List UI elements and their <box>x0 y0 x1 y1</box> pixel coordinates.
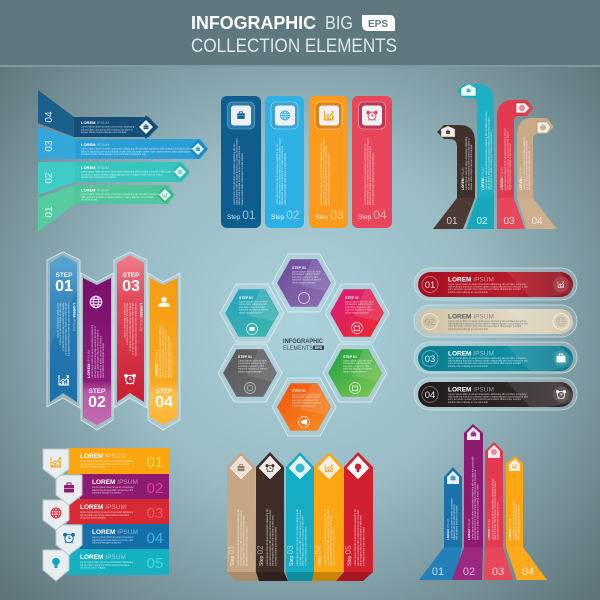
badge: EPS <box>362 15 395 31</box>
ribbon step 04: 04 <box>155 394 173 411</box>
hexagon grey: consectetur adipiscing elit <box>238 362 266 365</box>
hexagon grey: STEP 01 <box>238 355 252 359</box>
pill 03: LOREM IPSUM <box>448 350 494 358</box>
bar 03: elit sed diam nonummy nibh euismod tincidunt <box>80 514 129 517</box>
ribbon step 01: wisi enim ad minim veniam quis nostrud <box>59 303 62 346</box>
pill 02: nibh euismod tincidunt ut laoreet dolore magna aliquam erat volutpat ut wisi <box>448 323 528 326</box>
hexagon green <box>323 344 387 402</box>
card 04: aliquam erat volutpat ut wisi enim ad minim veniam quis <box>369 145 372 205</box>
bar 05: elit sed diam nonummy nibh euismod tincidunt <box>80 564 129 567</box>
column 04 <box>312 452 343 581</box>
pill 04: LOREM IPSUM <box>448 386 494 394</box>
column 04: Lorem ipsum dolor sit amet consectetur adipiscing elit <box>324 509 327 566</box>
hexagon orange: dolore magna aliquam <box>292 404 316 407</box>
ribbon 04: elit sed diam nonummy nibh euismod tincidunt <box>526 141 529 190</box>
pill 02: 02 <box>425 317 435 328</box>
hexagon grey <box>218 344 282 402</box>
arrow 04: 04 <box>522 566 534 578</box>
arrow 04: LOREM IPSUM <box>508 518 512 540</box>
column 01 <box>227 452 262 581</box>
ribbon 03: diam nonummy nibh euismod tincidunt ut laoreet dolore <box>507 131 510 190</box>
card 01: aliquam erat volutpat ut wisi enim ad minim veniam quis <box>238 145 241 205</box>
bar 04: 04 <box>147 530 163 547</box>
ribbon step 04: elit sed diam nonummy nibh euismod tincidunt ut <box>162 326 165 378</box>
bar 02: LOREM IPSUM <box>92 479 138 486</box>
column 03: dolore magna aliquam erat volutpat ut wisi enim <box>302 515 305 566</box>
ribbon 04: LOREM IPSUM <box>519 167 523 190</box>
step 01: 01 <box>44 206 55 218</box>
card 01: Step 01 <box>227 208 256 222</box>
step 02 <box>38 162 190 195</box>
bar 02: 02 <box>147 480 163 497</box>
step 04: elit sed diam nonummy nibh euismod tincidunt ut <box>81 128 133 131</box>
hexagon teal: STEP 01 <box>239 296 253 300</box>
pill 04: Lorem ipsum dolor sit amet consectetur adipiscing elit sed diam nonummy <box>448 393 527 396</box>
ribbon 04: ut laoreet dolore magna aliquam erat <box>528 151 531 190</box>
column 03: sed diam nonummy nibh euismod tincidunt ut laoreet <box>299 510 302 566</box>
arrow 03: magna aliquam erat volutpat ut wisi <box>497 502 500 540</box>
hexagon purple: sed diam nonummy nibh <box>292 276 319 279</box>
ribbon step 04: wisi enim ad minim veniam quis nostrud <box>167 335 170 378</box>
ribbon 01: elit sed diam nonummy nibh euismod tincidunt ut <box>468 138 471 190</box>
bar 04: adipiscing elit sed diam nonummy nibh <box>92 539 134 542</box>
bar 04 <box>56 524 169 555</box>
step 03: dolore magna aliquam erat volutpat ut wisi enim ad minim veniam quis nostrud exerci tation ullamcorper <box>81 150 191 153</box>
ribbon 04: Lorem ipsum dolor sit amet consectetur adipiscing <box>523 136 526 190</box>
ribbon 02: 02 <box>476 216 488 227</box>
bar 05: LOREM IPSUM <box>80 554 126 561</box>
ribbon step 04: Lorem ipsum dolor sit amet consectetur adipiscing <box>159 324 162 378</box>
card 02: nostrud exerci tation ullamcorper suscipit lobortis <box>284 153 287 205</box>
column 03: Lorem ipsum dolor sit amet consectetur adipiscing elit <box>296 509 299 566</box>
step 02: tincidunt ut laoreet dolore magna aliquam erat volutpat ut wisi enim ad minim <box>81 173 162 176</box>
arrow 01: adipiscing elit sed diam nonummy <box>453 503 456 540</box>
ribbon step 01: laoreet dolore magna aliquam erat volutpat ut <box>61 303 64 351</box>
column 05 <box>336 452 373 581</box>
pill 01 <box>414 268 577 300</box>
arrow 02: wisi enim ad minim veniam quis nostrud exerci tation <box>477 484 480 540</box>
center label <box>283 338 324 352</box>
step 02: 02 <box>44 172 55 184</box>
step 04: 04 <box>44 111 55 123</box>
pill 01: enim ad minim veniam quis nostrud exerci tation ullamcorper suscipit <box>448 288 521 291</box>
step 03: LOREM IPSUM <box>81 142 109 147</box>
pill 03: Lorem ipsum dolor sit amet consectetur adipiscing elit sed diam nonummy <box>448 357 527 360</box>
column 02: ad minim veniam quis nostrud exerci <box>274 527 277 566</box>
pill 04: lobortis nisl ut aliquip ex ea commodo <box>448 401 489 404</box>
arrow 02 <box>452 424 483 580</box>
ribbon step 01: elit sed diam nonummy nibh euismod tincidunt ut <box>64 303 67 355</box>
arrow 04: Lorem ipsum dolor sit amet consectetur <box>512 498 516 540</box>
pill 02: LOREM IPSUM <box>448 314 494 320</box>
column 05: Lorem ipsum dolor sit amet consectetur adipiscing elit <box>354 509 357 566</box>
pill 04: 04 <box>425 390 435 401</box>
ribbon 04 <box>517 118 557 229</box>
bar 02: adipiscing elit sed diam nonummy nibh <box>92 489 134 492</box>
ribbon step 02: STEP <box>89 388 106 395</box>
ribbon 02: ut wisi enim ad minim veniam quis nostrud exerci tation <box>490 131 493 190</box>
ribbon step 02: LOREM IPSUM <box>86 350 91 378</box>
ribbon 02 <box>457 84 494 229</box>
column 01: Lorem ipsum dolor sit amet consectetur adipiscing elit <box>237 509 240 566</box>
ribbon step 03: LOREM IPSUM <box>139 303 144 331</box>
step 03 <box>38 127 208 159</box>
hexagon teal: consectetur adipiscing elit <box>239 303 267 306</box>
arrow 01: LOREM IPSUM <box>446 518 450 540</box>
arrow 01: Lorem ipsum dolor sit amet consectetur <box>450 498 454 540</box>
bar 04: Lorem ipsum dolor sit amet consectetur <box>92 536 134 539</box>
card 02: Lorem ipsum dolor sit amet consectetur adipiscing elit sed <box>276 143 279 205</box>
hexagon orange: euismod tincidunt ut laoreet <box>292 402 322 405</box>
pill 01: lobortis nisl ut aliquip ex ea commodo <box>448 291 489 294</box>
hexagon green: STEP 01 <box>343 355 357 359</box>
ribbon step 03: STEP <box>123 272 140 279</box>
panel: arrow list 01-04 <box>38 90 208 232</box>
badge: EPS: EPS <box>368 19 388 30</box>
column 03 <box>286 452 314 581</box>
card 04: nostrud exerci tation ullamcorper suscipit lobortis <box>372 153 375 205</box>
hexagon teal: sed diam nonummy nibh <box>239 306 266 309</box>
pill 03: 03 <box>425 354 435 365</box>
ribbon 01 <box>433 125 475 229</box>
center label: ELEMENTS <box>283 345 314 352</box>
hexagon green: sed diam nonummy nibh <box>343 365 370 368</box>
ribbon 02: LOREM IPSUM <box>481 167 485 190</box>
arrow 03: Lorem ipsum dolor sit amet consectetur adipiscing elit sed <box>492 478 494 540</box>
card 02: diam nonummy nibh euismod tincidunt ut laoreet dolore magna <box>279 138 282 205</box>
pill 04: nibh euismod tincidunt ut laoreet dolore magna aliquam erat volutpat ut wisi <box>448 396 528 399</box>
arrow 02: LOREM IPSUM <box>467 518 471 540</box>
pill 04 <box>414 378 577 410</box>
bar 03: ut laoreet dolore magna <box>80 517 106 520</box>
hexagon orange: sed diam nonummy nibh <box>292 399 319 402</box>
hexagon grey: Lorem ipsum dolor sit amet <box>238 360 267 362</box>
pill 01: nibh euismod tincidunt ut laoreet dolore magna aliquam erat volutpat ut wisi <box>448 286 528 289</box>
step 04: laoreet dolore magna aliquam erat volutpat <box>81 131 127 134</box>
ribbon step 04: laoreet dolore magna aliquam erat volutpat ut <box>165 330 168 378</box>
card 01: nostrud exerci tation ullamcorper suscipit lobortis <box>241 153 244 205</box>
hexagon purple: dolore magna aliquam <box>292 281 316 284</box>
hexagon pink: Lorem ipsum dolor sit amet <box>345 300 374 304</box>
hexagon purple: euismod tincidunt ut laoreet <box>292 279 322 282</box>
hexagon pink: STEP 01 <box>345 296 359 300</box>
step 04: LOREM IPSUM <box>81 120 109 125</box>
card 04: Lorem ipsum dolor sit amet consectetur adipiscing elit sed <box>364 143 367 205</box>
column 05: dolore magna aliquam erat volutpat ut wisi enim <box>360 515 363 566</box>
pill 01: LOREM IPSUM <box>448 276 494 284</box>
ribbon 01: LOREM IPSUM <box>461 167 465 190</box>
pill 03: nibh euismod tincidunt ut laoreet dolore magna aliquam erat volutpat ut wisi <box>448 360 528 363</box>
column 02 <box>256 452 288 581</box>
arrow 02: 02 <box>463 566 475 578</box>
arrow 01: nibh euismod tincidunt ut laoreet <box>456 505 459 540</box>
step 01: LOREM IPSUM <box>81 188 109 192</box>
panel: glass ribbons step 01-04 <box>47 252 180 430</box>
ribbon 03: Lorem ipsum dolor sit amet consectetur adipiscing elit sed <box>504 128 507 190</box>
ribbon step 02: laoreet dolore magna aliquam erat volutpat ut <box>97 330 100 378</box>
bar 01: LOREM IPSUM <box>80 453 126 460</box>
step 02: LOREM IPSUM <box>81 165 109 170</box>
card 03: aliquam erat volutpat ut wisi enim ad minim veniam quis <box>325 145 328 205</box>
step 03: Lorem ipsum dolor sit amet consectetur adipiscing elit sed diam nonummy nibh euismod tincidunt ut laoreet <box>81 148 195 150</box>
ribbon step 03: laoreet dolore magna aliquam erat volutpat ut <box>128 303 131 351</box>
arrow 03: LOREM IPSUM <box>487 518 491 540</box>
hexagon orange: Lorem ipsum dolor sit amet <box>292 394 321 396</box>
hexagon orange: STEP 01 <box>292 389 306 393</box>
hexagon pink: dolore magna aliquam <box>345 311 369 314</box>
hexagon pink <box>325 284 389 342</box>
bar 01: elit sed diam nonummy nibh euismod tincidunt <box>80 463 129 466</box>
hexagon pink: consectetur adipiscing elit <box>345 303 373 306</box>
panel: glass pills 01-04 <box>414 268 577 410</box>
column 04: Step 04 <box>314 545 323 566</box>
ribbon step 01: STEP <box>56 272 73 279</box>
step 01 <box>38 185 175 232</box>
step 03: suscipit lobortis nisl ut aliquip ex ea commodo consequat duis <box>81 153 147 156</box>
bar 03: 03 <box>147 505 163 522</box>
hexagon purple: Lorem ipsum dolor sit amet <box>292 270 321 274</box>
card 01: Lorem ipsum dolor sit amet consectetur adipiscing elit sed <box>233 143 236 205</box>
column 03: Step 03 <box>286 545 295 566</box>
ribbon step 02 <box>81 273 113 430</box>
hexagon teal: euismod tincidunt ut laoreet <box>239 309 269 312</box>
hexagon orange <box>272 378 336 436</box>
hexagon purple: STEP 01 <box>292 266 306 270</box>
bar 04: LOREM IPSUM <box>92 529 138 536</box>
column 02: Lorem ipsum dolor sit amet consectetur adipiscing elit <box>266 509 269 566</box>
card 03: Step 03 <box>315 208 344 222</box>
ribbon 03: LOREM IPSUM <box>500 167 504 190</box>
column 01: sed diam nonummy nibh euismod tincidunt ut laoreet <box>240 510 243 566</box>
hexagon pink: euismod tincidunt ut laoreet <box>345 309 375 312</box>
bar 05: 05 <box>147 555 163 572</box>
card 03: nostrud exerci tation ullamcorper suscipit lobortis <box>328 153 331 205</box>
step 01: nibh euismod tincidunt ut laoreet dolore magna aliquam erat volutpat <box>81 196 154 199</box>
step 04: Lorem ipsum dolor sit amet consectetur adipiscing <box>81 126 135 128</box>
ribbon step 03 <box>114 252 147 408</box>
card 02 <box>265 96 304 228</box>
card 03: diam nonummy nibh euismod tincidunt ut laoreet dolore magna <box>323 138 326 205</box>
panel: hexagon cycle <box>218 254 389 436</box>
column 01: Step 01 <box>227 545 236 566</box>
bar 05: Lorem ipsum dolor sit amet consectetur adipiscing <box>80 561 134 564</box>
column 05: sed diam nonummy nibh euismod tincidunt ut laoreet <box>357 510 360 566</box>
ribbon step 02: Lorem ipsum dolor sit amet consectetur adipiscing <box>91 324 94 378</box>
column 04: dolore magna aliquam erat volutpat ut wisi enim <box>330 515 333 566</box>
ribbon step 01: exerci tation ullamcorper suscipit <box>56 303 59 338</box>
column 04: sed diam nonummy nibh euismod tincidunt ut laoreet <box>327 510 330 566</box>
bar 02: euismod tincidunt ut laoreet <box>92 492 122 495</box>
panel: curved ribbons 01-04 <box>433 84 557 229</box>
center label: INFOGRAPHIC <box>283 338 323 345</box>
pill 01: Lorem ipsum dolor sit amet consectetur adipiscing elit sed diam nonummy <box>448 283 527 286</box>
pill 03: enim ad minim veniam quis nostrud exerci tation ullamcorper suscipit <box>448 362 521 365</box>
column 04: ad minim veniam quis nostrud exerci <box>332 527 335 566</box>
bar 05 <box>43 549 169 581</box>
bar 02: Lorem ipsum dolor sit amet consectetur <box>92 486 134 489</box>
hexagon green: dolore magna aliquam <box>343 370 367 373</box>
ribbon step 01: 01 <box>55 278 73 295</box>
ribbon step 03: elit sed diam nonummy nibh euismod tincidunt ut <box>131 303 134 355</box>
ribbon step 03: 03 <box>122 278 140 295</box>
hexagon orange: consectetur adipiscing elit <box>292 396 320 399</box>
ribbon 01: laoreet dolore magna aliquam erat volutpat <box>470 144 473 190</box>
arrow 01: 01 <box>432 566 444 578</box>
hexagon green: Lorem ipsum dolor sit amet <box>343 360 372 362</box>
header band <box>0 0 600 67</box>
card 02: Step 02 <box>271 208 300 222</box>
title: BIG: BIG <box>325 13 353 33</box>
panel: rising arrows 01-04 <box>419 424 547 580</box>
card 04: Step 04 <box>358 208 387 222</box>
arrow 02: euismod tincidunt ut laoreet dolore magna aliquam erat volutpat ut <box>474 470 477 540</box>
column 03: ad minim veniam quis nostrud exerci <box>304 527 307 566</box>
card 03 <box>309 96 348 228</box>
pill 01: 01 <box>425 280 435 291</box>
step 02: veniam quis nostrud exerci tation <box>81 176 117 179</box>
arrow 04: nibh euismod tincidunt ut laoreet <box>518 505 521 540</box>
title: line one: INFOGRAPHIC <box>191 12 316 33</box>
card 04 <box>352 96 392 228</box>
ribbon step 02: exerci tation ullamcorper suscipit <box>102 343 105 378</box>
bar 03: LOREM IPSUM <box>80 504 126 511</box>
arrow 03: diam nonummy nibh euismod tincidunt ut laoreet dolore <box>494 481 497 540</box>
card 01 <box>221 96 261 228</box>
card 04: diam nonummy nibh euismod tincidunt ut laoreet dolore magna <box>367 138 370 205</box>
column 02: Step 02 <box>256 545 265 566</box>
panel: shield bars 01-05 <box>43 448 169 581</box>
hexagon green: euismod tincidunt ut laoreet <box>343 368 373 371</box>
arrow 04 <box>506 456 547 580</box>
ribbon step 02: 02 <box>88 394 106 411</box>
ribbon step 01: LOREM IPSUM <box>72 303 77 331</box>
ribbon step 03: exerci tation ullamcorper suscipit <box>123 303 126 338</box>
ribbon step 03: wisi enim ad minim veniam quis nostrud <box>126 303 129 346</box>
step 02: Lorem ipsum dolor sit amet consectetur adipiscing elit sed diam nonummy nibh euismod <box>81 170 175 174</box>
bar 03: Lorem ipsum dolor sit amet consectetur adipiscing <box>80 511 134 514</box>
pill 04: enim ad minim veniam quis nostrud exerci tation ullamcorper suscipit <box>448 398 521 401</box>
title: line two: COLLECTION ELEMENTS <box>191 36 397 57</box>
column 02: sed diam nonummy nibh euismod tincidunt ut laoreet <box>269 510 272 566</box>
card 03: Lorem ipsum dolor sit amet consectetur adipiscing elit sed <box>320 143 323 205</box>
bar 01: 01 <box>147 454 163 471</box>
column 05: ad minim veniam quis nostrud exerci <box>362 527 365 566</box>
hexagon grey: euismod tincidunt ut laoreet <box>238 368 268 371</box>
step 01: Lorem ipsum dolor sit amet consectetur adipiscing elit sed diam nonummy <box>81 193 160 196</box>
card 02: aliquam erat volutpat ut wisi enim ad minim veniam quis <box>281 145 284 205</box>
bar 03 <box>43 499 169 530</box>
hexagon teal: dolore magna aliquam <box>239 311 263 314</box>
arrow 01 <box>419 467 462 580</box>
ribbon step 04: STEP <box>156 388 173 395</box>
pill 02: Lorem ipsum dolor sit amet consectetur adipiscing elit sed diam nonummy <box>448 320 527 323</box>
ribbon step 04 <box>148 273 180 430</box>
ribbon 03: 03 <box>503 216 515 227</box>
hexagon purple <box>272 254 336 312</box>
hexagon green: consectetur adipiscing elit <box>343 362 371 365</box>
column 02: dolore magna aliquam erat volutpat ut wisi enim <box>272 515 275 566</box>
card 01: diam nonummy nibh euismod tincidunt ut laoreet dolore magna <box>236 138 239 205</box>
bar 01: ut laoreet dolore magna <box>80 466 106 469</box>
center label: EPS <box>315 346 323 350</box>
ribbon step 02: elit sed diam nonummy nibh euismod tincidunt ut <box>94 326 97 378</box>
bar 04: euismod tincidunt ut laoreet <box>92 542 122 545</box>
hexagon pink: sed diam nonummy nibh <box>345 306 372 309</box>
hexagon grey: sed diam nonummy nibh <box>238 365 265 368</box>
hexagon teal <box>220 284 284 342</box>
pill 03 <box>414 342 577 373</box>
pill 03: lobortis nisl ut aliquip ex ea commodo <box>448 365 489 368</box>
ribbon 02: Lorem ipsum dolor sit amet consectetur adipiscing elit sed diam nonummy <box>485 111 488 190</box>
ribbon 03: magna aliquam erat volutpat ut wisi enim ad <box>509 143 512 190</box>
arrow 04: adipiscing elit sed diam nonummy <box>515 503 518 540</box>
hexagon grey: dolore magna aliquam <box>238 370 262 373</box>
ribbon step 04: LOREM IPSUM <box>154 350 159 378</box>
ribbon step 02: wisi enim ad minim veniam quis nostrud <box>99 335 102 378</box>
bar 01: Lorem ipsum dolor sit amet consectetur adipiscing <box>80 460 134 463</box>
hexagon purple: consectetur adipiscing elit <box>292 273 320 276</box>
pill 02: enim ad minim veniam quis nostrud exerci tation ullamcorper suscipit <box>448 325 521 328</box>
step 04 <box>38 90 158 138</box>
ribbon step 01: Lorem ipsum dolor sit amet consectetur adipiscing <box>67 303 70 357</box>
pill 02: lobortis nisl ut aliquip ex ea commodo <box>448 328 489 331</box>
ribbon 04: 04 <box>531 216 543 227</box>
ribbon 01: Lorem ipsum dolor sit amet consectetur adipiscing <box>465 136 468 190</box>
hexagon teal: Lorem ipsum dolor sit amet <box>239 300 268 304</box>
column 01: ad minim veniam quis nostrud exerci <box>245 527 248 566</box>
ribbon step 04: exerci tation ullamcorper suscipit <box>170 343 173 378</box>
bar 02 <box>56 474 169 505</box>
arrow 02: Lorem ipsum dolor sit amet consectetur adipiscing elit sed diam nonummy nibh <box>472 456 474 540</box>
step 01: ut wisi enim ad <box>81 199 97 202</box>
ribbon 03 <box>497 100 533 229</box>
arrow 03: 03 <box>492 566 504 578</box>
ribbon step 03: Lorem ipsum dolor sit amet consectetur adipiscing <box>134 303 137 357</box>
bar 01 <box>43 448 169 479</box>
column 01: dolore magna aliquam erat volutpat ut wisi enim <box>243 515 246 566</box>
ribbon 01: 01 <box>446 216 458 227</box>
column 05: Step 05 <box>344 545 353 566</box>
bar 05: ut laoreet dolore magna <box>80 567 106 570</box>
arrow 03 <box>484 442 513 580</box>
ribbon step 01 <box>47 252 80 408</box>
ribbon 02: nibh euismod tincidunt ut laoreet dolore magna aliquam erat volutpat <box>488 117 491 190</box>
step 03: 03 <box>44 140 55 152</box>
panel: step cards 01-04 <box>221 96 392 228</box>
pill 02 <box>414 305 577 337</box>
panel: arrow columns step 01-05 <box>227 452 373 581</box>
